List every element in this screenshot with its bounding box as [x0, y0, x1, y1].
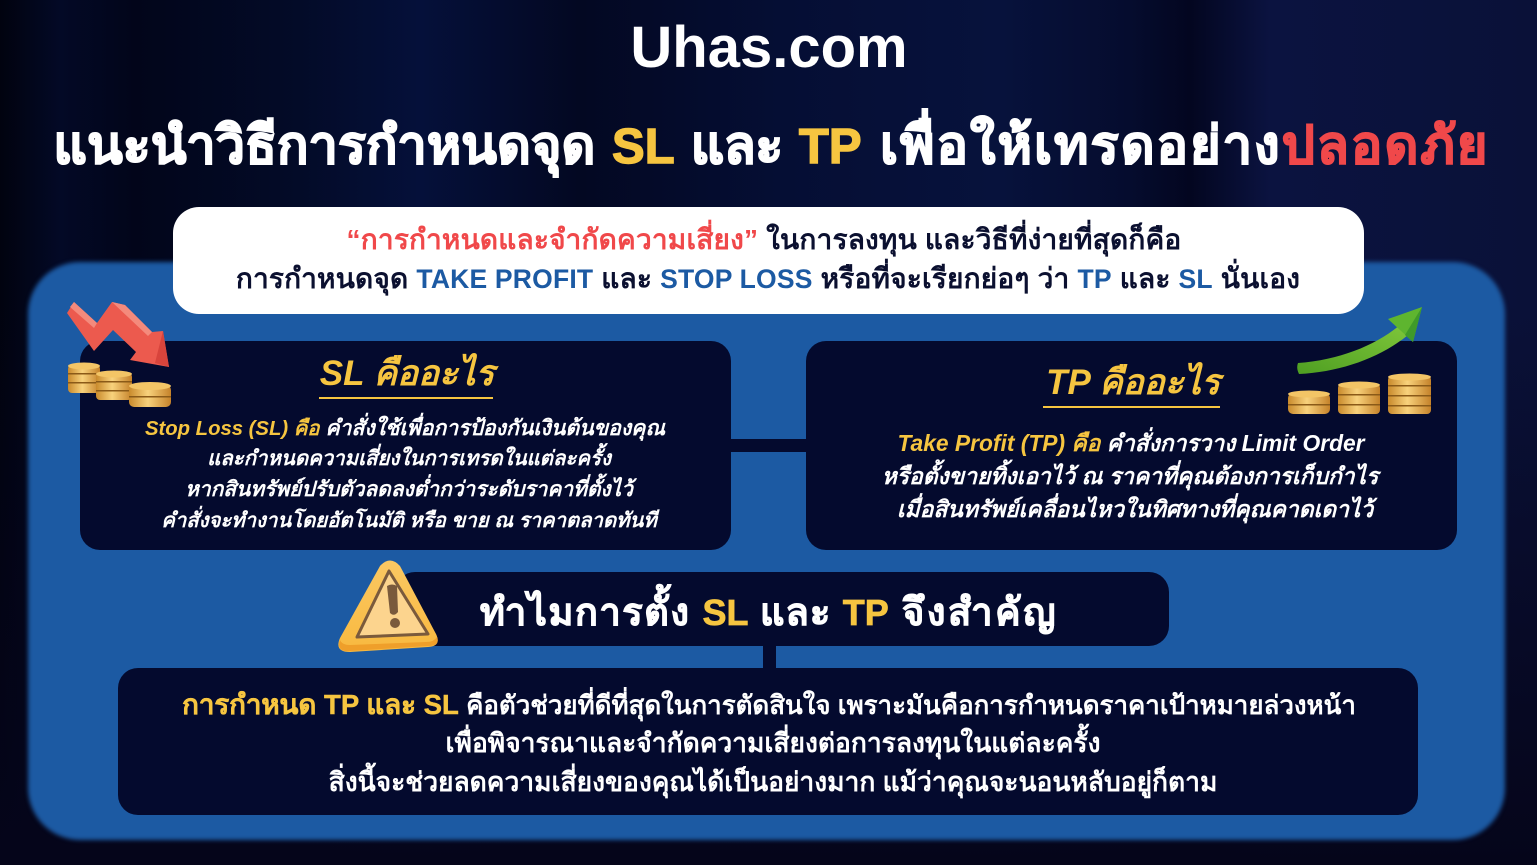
- TP text: Take Profit (TP) คือ คำสั่งการวาง Limit Order: [897, 430, 1365, 456]
- SL text: [145, 412, 666, 532]
- TP text: [882, 427, 1382, 524]
- panel: bottom explanation: การกำหนด TP และ SL คือตัวช่วยที่ดีที่สุดในการตัดสินใจ เพราะมันคือการกำหนดราคาเป้าหมายล่วงหน้า: [182, 689, 1356, 720]
- panel: SL definition: [80, 341, 731, 550]
- SL text: หากสินทรัพย์ปรับตัวลดลงต่ำกว่าระดับราคาที่ตั้งไว้: [185, 478, 633, 501]
- TP text: เมื่อสินทรัพย์เคลื่อนไหวในทิศทางที่คุณคาดเดาไว้: [897, 496, 1373, 522]
- panel: why banner: [395, 572, 1169, 646]
- TP heading: TP คืออะไร: [1046, 363, 1220, 402]
- panel: bottom explanation: เพื่อพิจารณาและจำกัดความเสี่ยงต่อการลงทุนในแต่ละครั้ง: [446, 728, 1100, 758]
- SL heading: SL คืออะไร: [320, 354, 494, 393]
- connector between why banner and bottom panel: [763, 640, 776, 675]
- panel: TP definition: [806, 341, 1457, 550]
- connector between SL and TP panels: [725, 439, 815, 452]
- icon: warning triangle: [338, 560, 438, 652]
- SL text: คำสั่งจะทำงานโดยอัตโนมัติ หรือ ขาย ณ ราคาตลาดทันที: [161, 510, 657, 532]
- blue panel: [28, 262, 1505, 840]
- SL text: และกำหนดความเสี่ยงในการเทรดในแต่ละครั้ง: [207, 448, 611, 470]
- icon: green up arrow with coins: [1288, 307, 1431, 414]
- icon: red down arrow with coins: [67, 302, 171, 407]
- TP text: หรือตั้งขายทิ้งเอาไว้ ณ ราคาที่คุณต้องการเก็บกำไร: [882, 463, 1378, 489]
- panel: bottom explanation: สิ่งนี้จะช่วยลดความเสี่ยงของคุณได้เป็นอย่างมาก แม้ว่าคุณจะนอนหลับอยู่ก็ตาม: [329, 767, 1217, 797]
- title: Uhas.com: [630, 15, 908, 80]
- panel: intro callout: [173, 207, 1364, 314]
- panel: intro callout: การกำหนดจุด TAKE PROFIT และ STOP LOSS หรือที่จะเรียกย่อๆ ว่า TP และ SL นั่นเอง: [236, 263, 1300, 294]
- panel: bottom explanation: [118, 668, 1418, 815]
- why heading: ทำไมการตั้ง SL และ TP จึงสำคัญ: [480, 592, 1058, 634]
- SL text: Stop Loss (SL) คือ คำสั่งใช้เพื่อการป้องกันเงินต้นของคุณ: [145, 417, 665, 440]
- panel: intro callout: “การกำหนดและจำกัดความเสี่ยง” ในการลงทุน และวิธีที่ง่ายที่สุดก็คือ: [347, 224, 1181, 255]
- heading: แนะนำวิธีการกำหนดจุด SL และ TP เพื่อให้เทรดอย่างปลอดภัย: [53, 117, 1490, 175]
